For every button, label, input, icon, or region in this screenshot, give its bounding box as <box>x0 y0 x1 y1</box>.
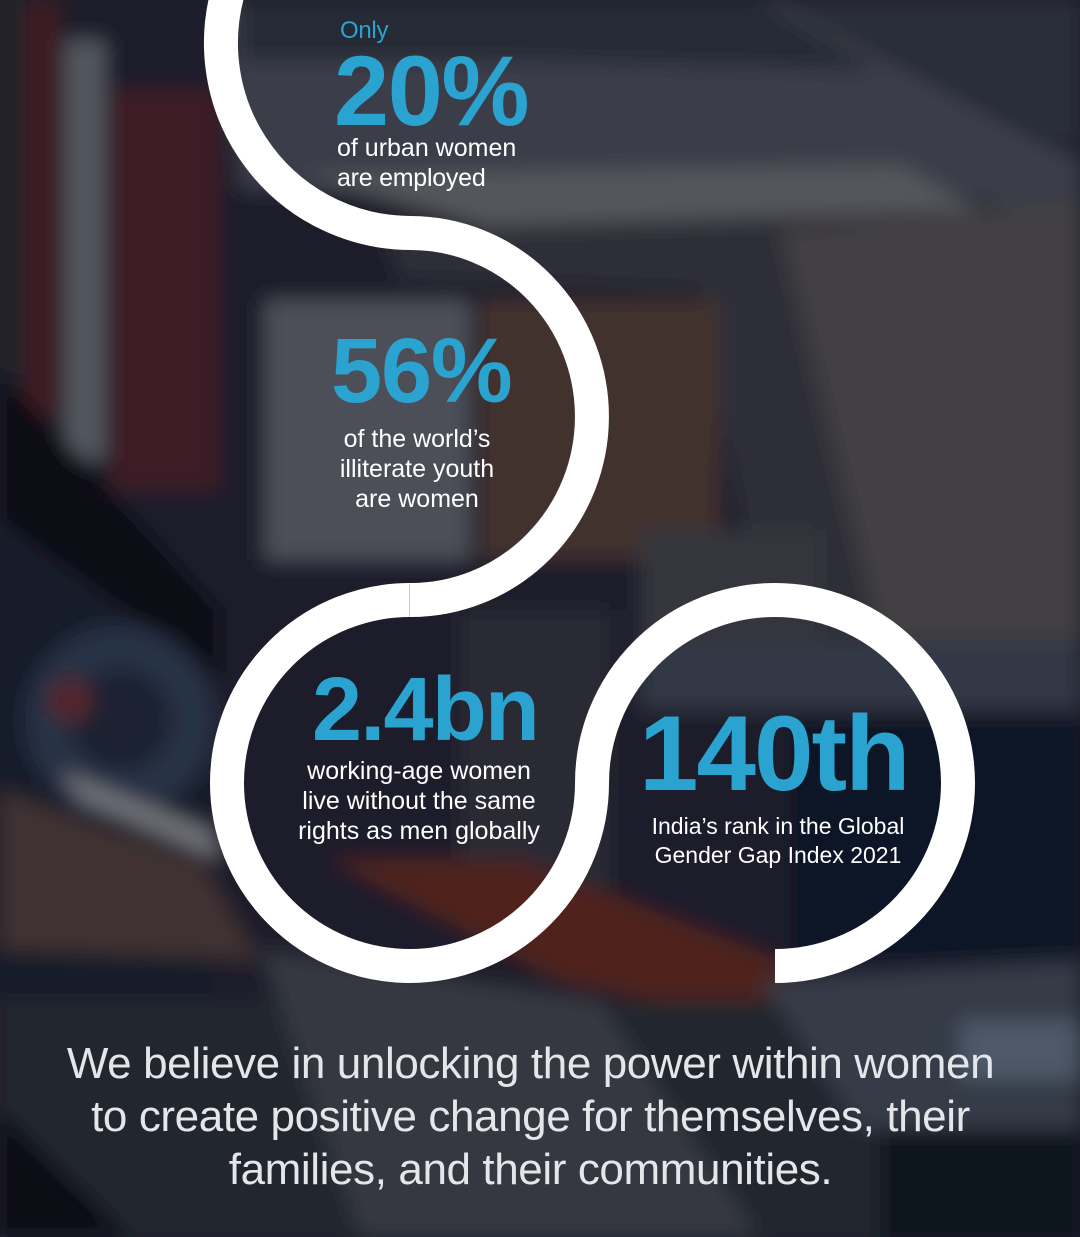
description: of the world’s <box>344 425 490 453</box>
description: of urban women <box>337 134 516 162</box>
description <box>298 757 540 845</box>
closing statement <box>67 1039 994 1194</box>
closing statement: We believe in unlocking the power within women <box>67 1039 994 1088</box>
description: live without the same <box>302 787 536 815</box>
description: Gender Gap Index 2021 <box>655 842 901 868</box>
stat: 2.4bn working-age women <box>298 660 540 845</box>
stat: 140th gender gap rank <box>639 693 909 868</box>
number: 140th: 140th <box>639 693 909 813</box>
description: rights as men globally <box>298 817 540 845</box>
label: only: Only <box>340 17 388 44</box>
stat: 56% illiterate youth <box>331 320 512 513</box>
number: 56%: 56% <box>331 320 512 422</box>
description: working-age women <box>307 757 531 785</box>
closing statement: families, and their communities. <box>229 1145 832 1194</box>
description: are women <box>355 485 479 513</box>
closing statement: to create positive change for themselves, their <box>91 1092 970 1141</box>
description <box>340 425 494 513</box>
number: 20%: 20% <box>334 35 528 146</box>
description: India’s rank in the Global <box>652 813 904 839</box>
number: 2.4bn: 2.4bn <box>312 660 538 760</box>
description: are employed <box>337 164 485 192</box>
description <box>337 134 516 192</box>
description <box>652 813 904 868</box>
stat: 20% urban women employed <box>334 17 528 192</box>
description: illiterate youth <box>340 455 494 483</box>
